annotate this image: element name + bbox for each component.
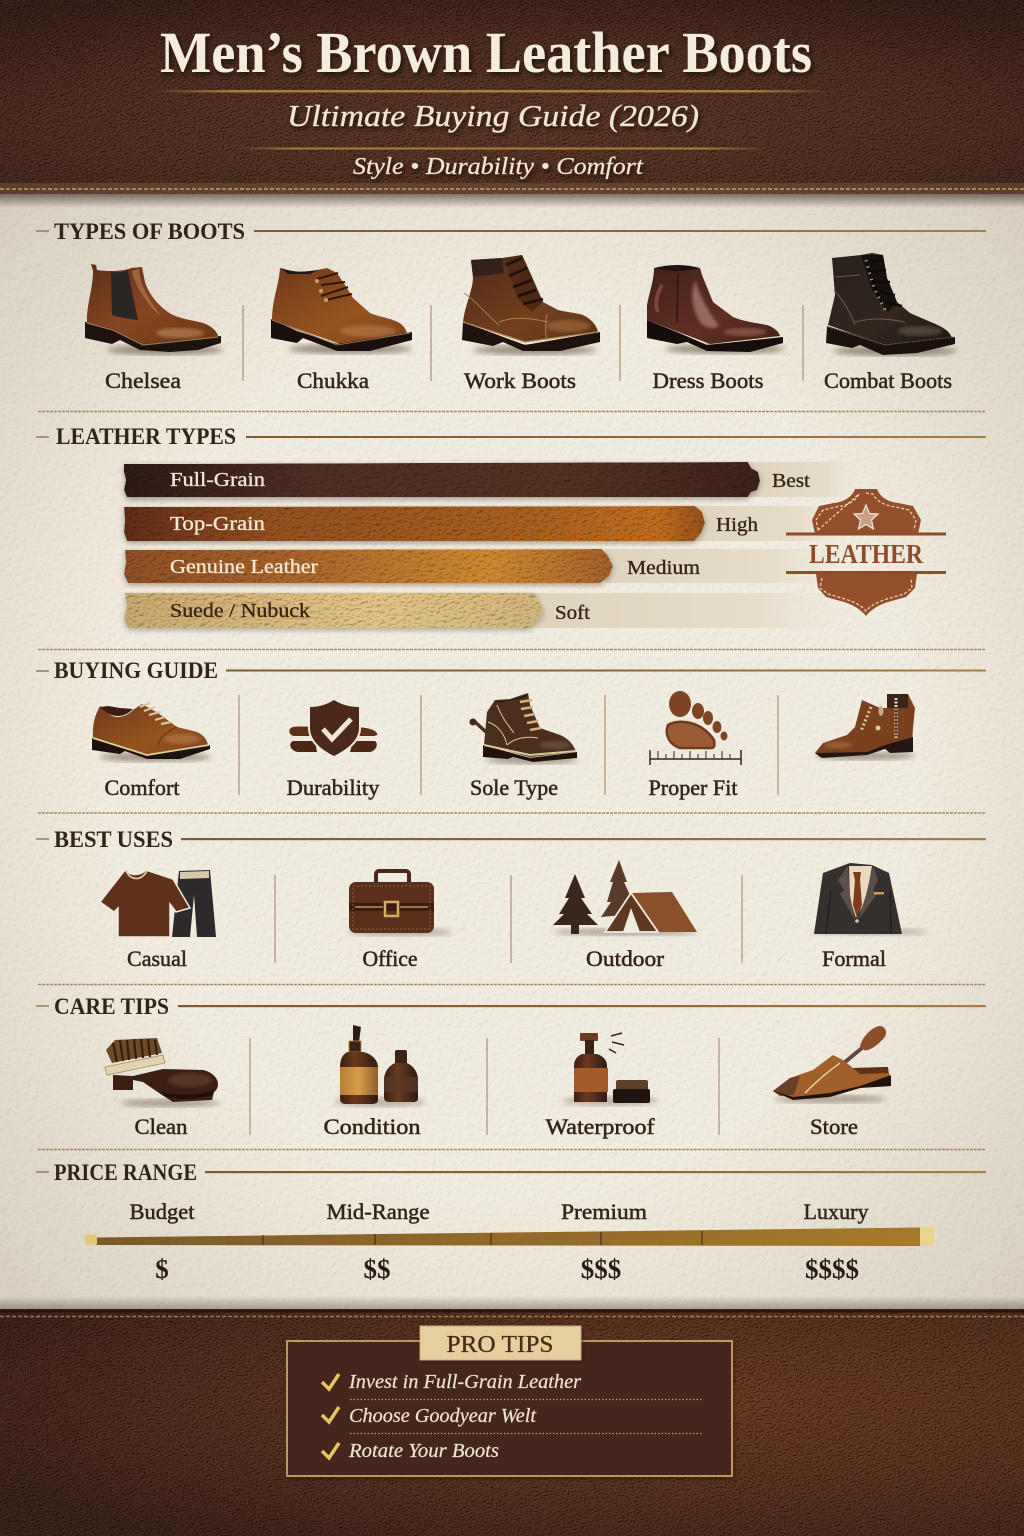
value: soft: Soft xyxy=(555,602,590,624)
label: dress boots: Dress Boots xyxy=(652,368,764,393)
label: outdoor: Outdoor xyxy=(586,946,665,971)
label: clean: Clean xyxy=(134,1114,188,1139)
tip: full-grain: Invest in Full-Grain Leather xyxy=(348,1372,581,1393)
bar: genuine leather: Genuine Leather xyxy=(170,556,318,578)
value: high: High xyxy=(716,514,758,536)
section: best uses xyxy=(36,827,986,971)
bar: genuine leather xyxy=(124,549,613,585)
label: luxury: Luxury xyxy=(804,1199,868,1224)
badge: leather: LEATHER xyxy=(809,539,923,569)
label: mid-range: Mid-Range xyxy=(326,1199,430,1224)
value: medium: Medium xyxy=(627,557,700,579)
icon: proper fit foot and ruler xyxy=(650,691,741,765)
panel: pro tips xyxy=(287,1326,732,1476)
icon: casual clothes xyxy=(100,870,216,937)
label: proper fit: Proper Fit xyxy=(648,775,738,800)
icon: side zip boot xyxy=(815,694,915,760)
label: waterproof: Waterproof xyxy=(546,1114,655,1139)
section: price range xyxy=(36,1160,986,1284)
subtitle: Ultimate Buying Guide (2026) xyxy=(287,98,699,133)
label: store: Store xyxy=(810,1114,858,1139)
pro tips tab xyxy=(420,1326,581,1360)
icon: outdoor trees and tent xyxy=(553,860,697,936)
bar: top-grain: Top-Grain xyxy=(170,513,265,535)
bar: full-grain: Full-Grain xyxy=(170,469,265,491)
label: formal: Formal xyxy=(822,946,886,971)
bar backings xyxy=(530,462,860,628)
label: office: Office xyxy=(362,946,418,971)
label: sole type: Sole Type xyxy=(470,775,558,800)
icon: work boot xyxy=(462,255,600,355)
icon: durability shield xyxy=(289,698,377,758)
icon: store shoe tree xyxy=(773,1026,891,1103)
price: budget: $ xyxy=(155,1254,169,1284)
value: best: Best xyxy=(772,470,810,492)
icon: office briefcase xyxy=(348,871,452,936)
badge: leather xyxy=(786,489,946,616)
icon: chelsea boot xyxy=(85,264,223,355)
icon: combat boot xyxy=(826,253,957,356)
label: comfort: Comfort xyxy=(104,775,180,800)
price: mid-range: $$ xyxy=(364,1254,390,1284)
heading: price range: PRICE RANGE xyxy=(54,1160,197,1185)
subtitle rule xyxy=(235,148,767,150)
bar: suede nubuck xyxy=(124,593,543,630)
price: luxury: $$$$ xyxy=(805,1254,859,1284)
header band xyxy=(0,0,1024,208)
icon: chukka boot xyxy=(271,268,412,354)
icon: comfort shoe xyxy=(92,703,211,762)
label: budget: Budget xyxy=(130,1199,194,1224)
icon: clean brush and shoe xyxy=(105,1038,220,1107)
tagline: Style • Durability • Comfort xyxy=(353,154,644,180)
pro tips box xyxy=(287,1341,732,1476)
section: buying guide xyxy=(36,658,986,800)
label: durability: Durability xyxy=(286,775,380,800)
label: chelsea: Chelsea xyxy=(105,368,181,393)
heading: types of boots: TYPES OF BOOTS xyxy=(54,219,245,244)
icon: waterproof spray and tin xyxy=(562,1033,658,1106)
tip: rotate boots: Rotate Your Boots xyxy=(348,1441,499,1462)
heading: care tips: CARE TIPS xyxy=(54,994,169,1019)
bar: suede nubuck: Suede / Nubuck xyxy=(170,600,310,622)
title rule xyxy=(155,90,827,92)
heading: leather types: LEATHER TYPES xyxy=(56,424,236,449)
icon: condition bottles xyxy=(334,1025,426,1107)
label: chukka: Chukka xyxy=(297,368,369,393)
price scale bar xyxy=(85,1227,934,1246)
heading: best uses: BEST USES xyxy=(54,827,173,852)
pro tips tab: PRO TIPS xyxy=(446,1332,554,1358)
section: leather types xyxy=(36,424,986,630)
label: premium: Premium xyxy=(561,1199,647,1224)
bar: full-grain xyxy=(124,462,760,500)
heading: buying guide: BUYING GUIDE xyxy=(54,658,218,683)
section: care tips xyxy=(36,994,986,1139)
bar: top-grain xyxy=(124,506,705,543)
icon: formal suit xyxy=(812,863,928,936)
label: combat boots: Combat Boots xyxy=(824,368,952,393)
footer band xyxy=(0,1296,1024,1536)
title: Men’s Brown Leather Boots xyxy=(160,20,812,85)
price: premium: $$$ xyxy=(581,1254,621,1284)
label: casual: Casual xyxy=(127,946,187,971)
icon: sole type boot xyxy=(470,693,578,764)
label: work boots: Work Boots xyxy=(464,368,576,393)
tip: goodyear welt: Choose Goodyear Welt xyxy=(349,1406,537,1427)
label: condition: Condition xyxy=(324,1114,420,1139)
icon: dress boot xyxy=(647,265,785,354)
section: types of boots xyxy=(36,219,986,393)
